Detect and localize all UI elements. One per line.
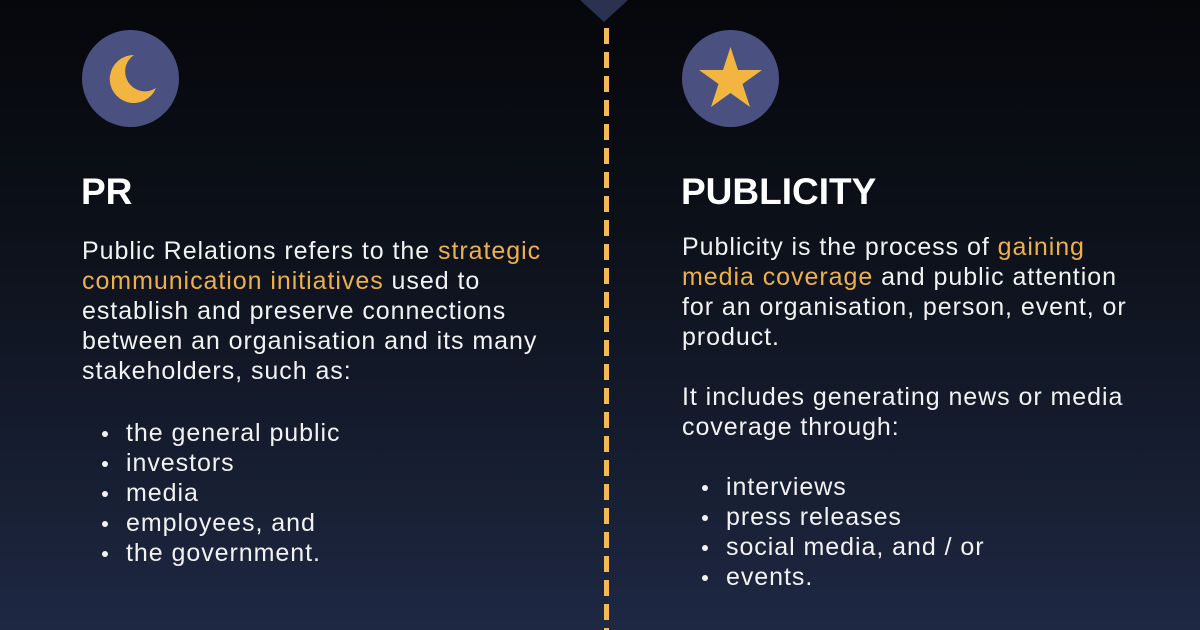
text block: publicity definition	[682, 233, 1127, 351]
text block: publicity definition: for an organisation, person, event, or	[682, 293, 1127, 321]
heading: PR: PR	[81, 171, 132, 212]
text block: publicity definition: media coverage and public attention	[682, 263, 1117, 291]
list: PR stakeholders: media	[126, 479, 199, 507]
text block: publicity definition: product.	[682, 323, 780, 351]
list: publicity channels: events.	[726, 563, 813, 591]
list: publicity channels: social media, and / or	[726, 533, 985, 561]
top triangle	[580, 0, 628, 22]
list: publicity channels	[702, 473, 985, 591]
list: PR stakeholders: investors	[126, 449, 235, 477]
list: publicity channels: interviews	[726, 473, 847, 501]
list: PR stakeholders: the general public	[126, 419, 340, 447]
text block: PR definition	[82, 237, 541, 385]
list: publicity channels: press releases	[726, 503, 902, 531]
list: PR stakeholders	[102, 419, 340, 567]
list: PR stakeholders: employees, and	[126, 509, 316, 537]
text block: publicity definition: Publicity is the process of gaining	[682, 233, 1085, 261]
icon: star	[682, 30, 779, 127]
heading: PUBLICITY: PUBLICITY	[681, 171, 876, 212]
icon: moon	[82, 30, 179, 127]
text block: publicity includes: It includes generating news or media	[682, 383, 1123, 411]
dashed divider	[604, 28, 609, 630]
text block: PR definition: communication initiatives used to	[82, 267, 480, 295]
text block: publicity includes: coverage through:	[682, 413, 900, 441]
text block: PR definition: establish and preserve connections	[82, 297, 506, 325]
text block: PR definition: stakeholders, such as:	[82, 357, 352, 385]
text block: PR definition: Public Relations refers to the strategic	[82, 237, 541, 265]
list: PR stakeholders: the government.	[126, 539, 321, 567]
text block: publicity includes	[682, 383, 1123, 441]
text block: PR definition: between an organisation and its many	[82, 327, 537, 355]
